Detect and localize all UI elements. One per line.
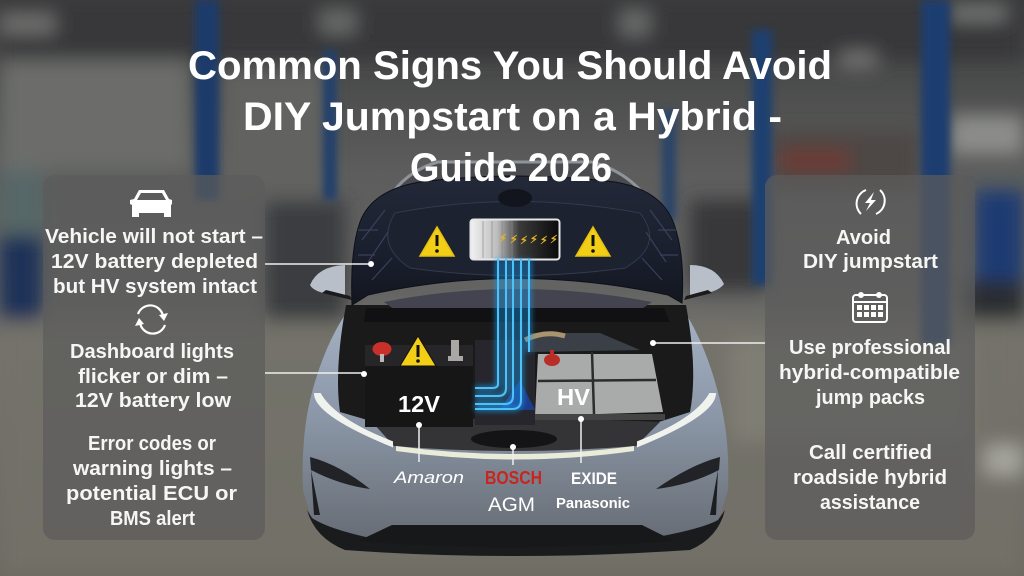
hood underside [352, 176, 683, 305]
lightning bolts: ⚡︎ [540, 235, 548, 247]
cowl and hood slot [372, 418, 660, 451]
brand logos: AGM [488, 495, 535, 516]
brand logos: Panasonic [556, 495, 630, 512]
car body [303, 305, 728, 545]
icon: hood warning triangle left [420, 227, 454, 256]
text: professional jump packs: jump packs [815, 387, 925, 409]
engine wiring clutter [475, 340, 535, 425]
red terminal [372, 342, 392, 356]
text: roadside assistance [793, 442, 947, 514]
text: vehicle will not start: Vehicle will not start – [45, 226, 263, 248]
icon: car [130, 190, 172, 217]
HV battery pack [535, 350, 665, 420]
text: roadside assistance: Call certified [809, 442, 932, 464]
brand logos: Amaron [393, 468, 464, 487]
text: dashboard lights: flicker or dim – [78, 366, 228, 388]
text: error codes: Error codes or [88, 433, 216, 455]
text: vehicle will not start [45, 226, 263, 298]
text: avoid diy jumpstart: Avoid [836, 227, 891, 249]
blue energy flow lines [475, 259, 529, 409]
text: professional jump packs: Use professional [789, 337, 951, 359]
lightning bolts: ⚡︎ [520, 235, 528, 247]
text: error codes [66, 433, 237, 530]
icon: warning triangle on battery [400, 336, 436, 366]
lightning bolts [499, 233, 558, 247]
text: dashboard lights [70, 341, 234, 412]
title: DIY Jumpstart on a Hybrid - [243, 95, 782, 139]
leader lines with dots [265, 261, 765, 465]
brand logos: EXIDE [571, 469, 617, 488]
title [188, 44, 832, 190]
hood screen: battery status [470, 220, 560, 260]
text: error codes: potential ECU or [66, 483, 237, 505]
icon: calendar [853, 293, 887, 322]
silver terminal [448, 340, 463, 361]
icon: hood warning triangle right [576, 227, 610, 256]
12V label: 12V [398, 391, 441, 417]
headlight strips [315, 394, 715, 460]
text: roadside assistance: assistance [820, 492, 920, 514]
text: vehicle will not start: but HV system intact [53, 276, 257, 298]
text: avoid diy jumpstart: DIY jumpstart [803, 251, 938, 273]
title: Guide 2026 [410, 146, 612, 190]
lower lip [307, 510, 725, 556]
lightning bolts: ⚡︎ [550, 234, 558, 246]
text: avoid diy jumpstart [803, 227, 938, 273]
icon: refresh arrows [135, 305, 168, 334]
title: Common Signs You Should Avoid [188, 44, 832, 88]
icon: circular bolt [857, 190, 885, 214]
lightning bolts: ⚡︎ [499, 233, 507, 245]
brand logos [393, 468, 630, 516]
mirrors [310, 265, 724, 300]
lightning bolts: ⚡︎ [530, 234, 538, 246]
text: professional jump packs: hybrid-compatible [779, 362, 960, 384]
brand logos: BOSCH [485, 468, 542, 488]
car: silver hybrid with open hood [303, 162, 728, 556]
panel: warning signs [43, 175, 265, 540]
text: error codes: warning lights – [72, 458, 232, 480]
text: roadside assistance: roadside hybrid [793, 467, 947, 489]
fog lights [310, 457, 720, 515]
text: vehicle will not start: 12V battery depleted [51, 251, 258, 273]
lightning bolts: ⚡︎ [510, 234, 518, 246]
panel: recommended actions [765, 175, 975, 540]
text: dashboard lights: 12V battery low [75, 390, 231, 412]
text: error codes: BMS alert [110, 508, 195, 530]
engine bay [338, 305, 693, 428]
lower grille [358, 525, 674, 548]
roof behind hood [393, 162, 642, 192]
12V battery [365, 336, 473, 427]
text: professional jump packs [779, 337, 960, 409]
HV label: HV [557, 384, 591, 410]
text: dashboard lights: Dashboard lights [70, 341, 234, 363]
